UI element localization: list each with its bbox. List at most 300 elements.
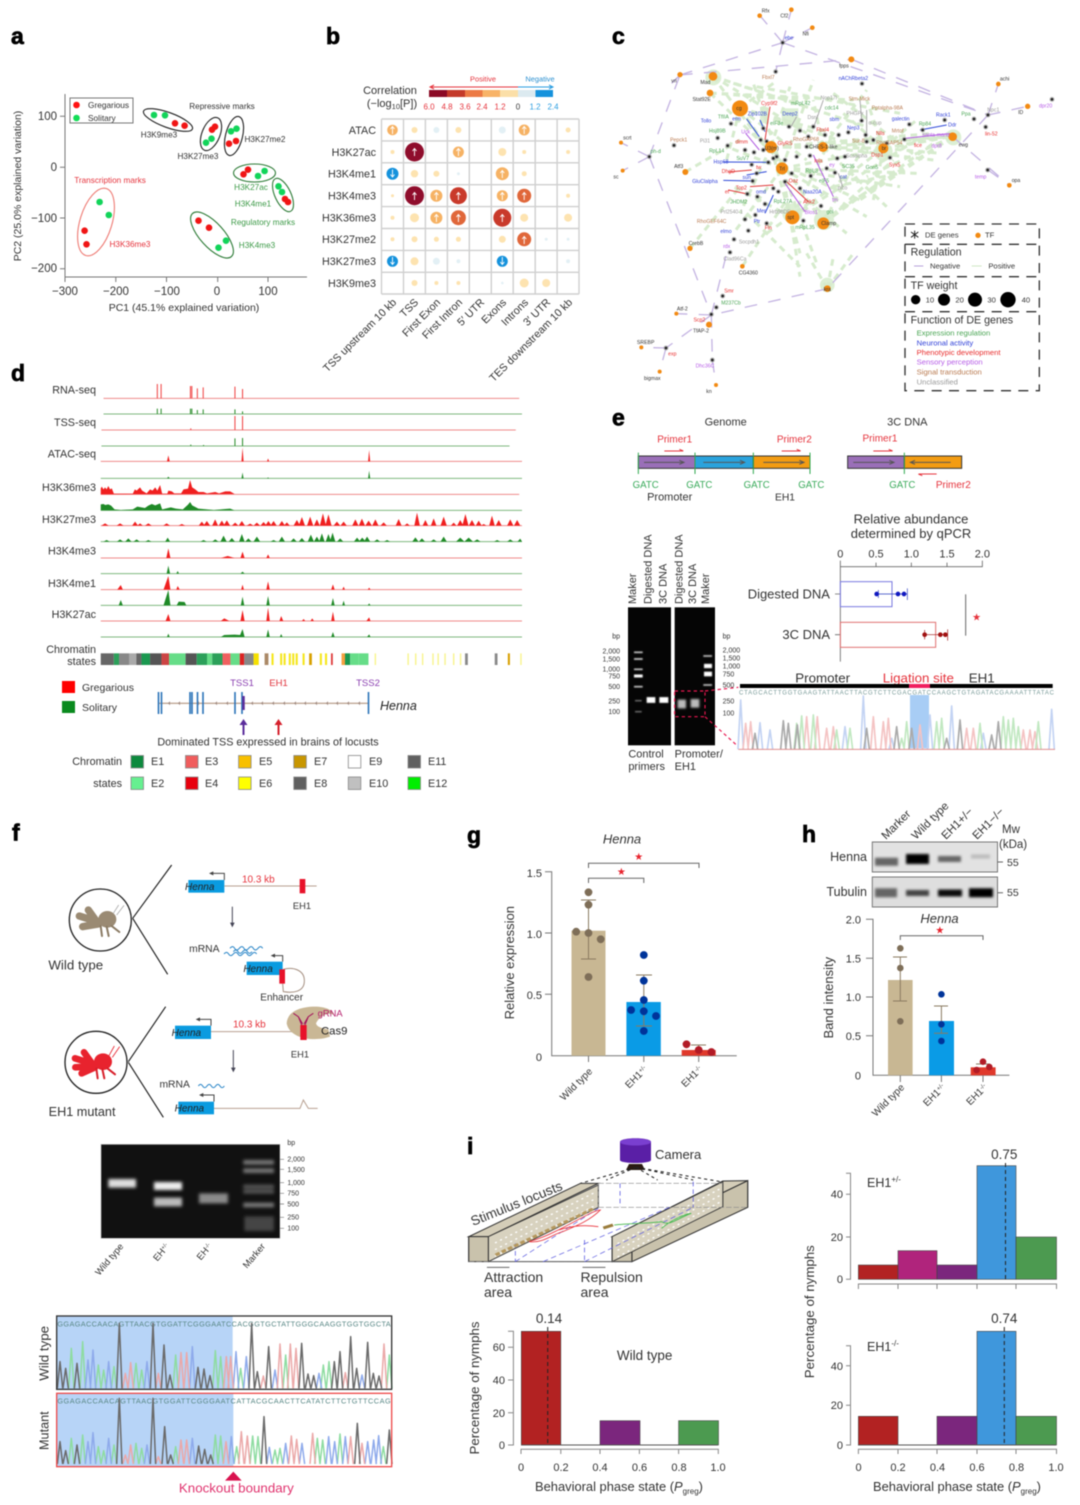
- gel size labels: 250: [287, 1215, 299, 1222]
- pale blue bubbles: [433, 126, 570, 284]
- category labels: EH1: [624, 1069, 645, 1091]
- transcription factor nodes: [619, 7, 1030, 387]
- network labels: expression regulation: ph-d: [651, 149, 661, 155]
- track labels: states: [67, 656, 97, 668]
- gel captions: [628, 749, 724, 773]
- orange bubbles: [387, 124, 530, 224]
- qPCR bar chart: Digested DNA: [748, 586, 830, 601]
- phase legend: Solitary: [82, 702, 118, 714]
- histogram: EH1 heterozygote: [831, 1147, 1056, 1289]
- chromatin states legend: E8: [314, 778, 327, 790]
- faint bubbles: [390, 127, 572, 288]
- PC2 axis title: PC2 (25.0% explained variation): [12, 111, 24, 261]
- gel size labels: 100: [723, 711, 734, 718]
- row labels: H3K36me3: [322, 212, 376, 224]
- gel size labels: 1,000: [603, 667, 620, 674]
- axis title: Band intensity: [821, 956, 836, 1039]
- gel lane labels: +/-: [160, 1242, 169, 1251]
- correlation legend: Correlation: [363, 85, 417, 97]
- gel captions: Control: [628, 749, 664, 761]
- strong bubbles: [386, 142, 531, 267]
- network labels: TFs and unlabelled: ewg: [959, 143, 968, 149]
- green H3K27me3 spikes: [104, 533, 522, 542]
- western blot: [826, 842, 1019, 907]
- network labels: TFs and unlabelled: U3(m): [765, 146, 779, 152]
- gel size labels: 750: [608, 674, 620, 681]
- network labels: TFs and unlabelled: fpps: [839, 64, 849, 70]
- network labels: sensory perception: dpr20: [1039, 104, 1052, 110]
- network labels: phenotypic development: Smr: [724, 289, 734, 295]
- gel size labels: 1,000: [723, 663, 740, 670]
- arrows at TSS1 and EH1: [240, 719, 282, 735]
- network labels: TFs and unlabelled: ID: [1018, 110, 1024, 116]
- network labels: TFs and unlabelled: vri: [671, 78, 677, 84]
- gel lane labels: [93, 1241, 267, 1277]
- green RNA and TSS spikes: [157, 409, 243, 446]
- network labels: TFs and unlabelled: opa: [1012, 178, 1020, 184]
- network labels: sensory perception: [696, 104, 1052, 370]
- network labels: phenotypic development: Dsp1: [871, 153, 883, 159]
- qPCR bar chart: 0.5: [868, 548, 884, 560]
- tick labels: 1.0: [527, 929, 542, 941]
- green track baselines: [101, 414, 522, 637]
- red ChIP and ATAC peaks: [117, 447, 371, 621]
- gel size labels: 1,500: [603, 657, 620, 664]
- histogram: wild type: ): [699, 1479, 703, 1494]
- mutant chromatogram: GGAGACCAACAGTTAACGTGGATTCGGGAATCATTACGCAACTTCATATCTTCTGTTCCAG: [57, 1396, 391, 1405]
- panel letter i: i: [467, 1133, 473, 1159]
- western blot: 55: [1007, 887, 1019, 899]
- signal tracks: [101, 384, 522, 665]
- histogram: wild type: Percentage of nymphs: [467, 1321, 482, 1455]
- Cas9 targeting locus: Henna: [172, 1028, 202, 1039]
- histogram: EH1 homozygote: 0.74: [991, 1311, 1018, 1326]
- significance brackets: [588, 852, 699, 883]
- histogram: EH1 homozygote: ): [1037, 1479, 1041, 1494]
- histogram: wild type: 0.8: [671, 1462, 687, 1474]
- histogram: wild type: 60: [493, 1342, 505, 1354]
- panel d: genome tracks: [11, 360, 522, 790]
- network labels: neuronal activity: sun: [743, 175, 751, 181]
- legend: group colours: Solitary: [88, 113, 117, 123]
- network legend: Sensory perception: [917, 358, 983, 367]
- cluster ellipses: [70, 104, 298, 265]
- PCA tick labels: −300: [52, 286, 78, 298]
- qPCR bar chart: 1.0: [904, 548, 919, 560]
- knockout boundary marker: Knockout boundary: [179, 1481, 294, 1496]
- gel lane labels: -/-: [204, 1242, 212, 1250]
- chromatin states legend: E2: [151, 778, 164, 790]
- histogram: wild type: 0: [499, 1440, 505, 1452]
- TSS caption: Dominated TSS expressed in brains of locusts: [157, 736, 379, 748]
- column labels: TES downstream 10 kb: [487, 297, 575, 384]
- 3C DNA construct: Primer1: [863, 434, 898, 445]
- network labels: signal transduction: Sur-8: [852, 139, 865, 145]
- genome construct: GATC: [798, 480, 824, 491]
- panel b: correlation bubble matrix: [321, 23, 579, 384]
- mark labels: Transcription marks: [74, 176, 146, 185]
- network labels: unclassified: Hrb98DE: [769, 209, 791, 215]
- network labels: neuronal activity: Mer: [757, 208, 766, 214]
- correlation legend: 2.4: [476, 102, 488, 112]
- network labels: neuronal activity: ebe: [785, 35, 793, 41]
- network labels: neuronal activity: Naa20A: [803, 190, 822, 196]
- significance bracket: ★: [935, 926, 944, 936]
- network labels: unclassified: Socpdh1: [739, 239, 759, 245]
- track labels: [42, 384, 97, 668]
- network labels: TFs and unlabelled: Cf2: [780, 13, 788, 19]
- histogram: EH1 homozygote: EH1: [867, 1340, 891, 1354]
- network labels: TFs and unlabelled: scrt: [623, 135, 632, 141]
- histogram: EH1 homozygote: 0.8: [1009, 1462, 1024, 1474]
- bubble arrows: [390, 126, 526, 264]
- track labels: H3K36me3: [42, 482, 96, 494]
- network labels: sensory perception: Dhc36C: [696, 364, 715, 370]
- network labels: sensory perception: Blos1: [805, 210, 818, 216]
- network labels: phenotypic development: Fbxl4: [816, 127, 829, 133]
- attraction area label: area: [484, 1284, 512, 1300]
- histogram: EH1 heterozygote: 0.75: [991, 1147, 1017, 1162]
- row labels: H3K27ac: [332, 147, 377, 159]
- wild type arrow: [230, 907, 235, 927]
- network labels: phenotypic development: GlyRS: [778, 141, 793, 147]
- network labels: signal transduction: Pptalpha-98A: [872, 105, 904, 111]
- histogram: EH1 homozygote: 1.0: [1048, 1462, 1064, 1474]
- histogram: EH1 homozygote: 40: [831, 1361, 843, 1373]
- mark labels: H3K27ac: [234, 183, 268, 192]
- qPCR bar chart: determined by qPCR: [851, 526, 971, 541]
- gel size labels: 250: [608, 698, 620, 705]
- PCA tick labels: [31, 111, 278, 298]
- network labels: neuronal activity: sbm: [829, 117, 839, 123]
- column labels: 5′ UTR: [455, 296, 487, 329]
- network labels: phenotypic development: Top2: [736, 186, 747, 192]
- network labels: signal transduction: RhoGAP54: [876, 141, 902, 147]
- network labels: TFs and unlabelled: Stat92E: [692, 97, 711, 103]
- Cas9 targeting locus: 10.3 kb: [233, 1020, 266, 1031]
- Cas9 targeting locus: EH1: [291, 1050, 309, 1060]
- panel e: 3C ligation assay: [603, 405, 1055, 773]
- network labels: TFs and unlabelled: kn: [706, 389, 712, 395]
- panel f: genotyping gel and sequencing: [36, 1140, 392, 1496]
- mutant mRNA: mRNA: [159, 1079, 190, 1090]
- chromatin states legend: [72, 756, 447, 790]
- network labels: expression regulation: [651, 101, 971, 306]
- network labels: expression regulation: RpL27A: [774, 199, 793, 205]
- network labels: sensory perception: tm: [832, 198, 838, 204]
- active locus with looped enhancer: [243, 954, 304, 1003]
- network labels: unclassified: [700, 96, 999, 263]
- chromatin states legend: E11: [428, 756, 446, 768]
- title: Henna: [603, 832, 641, 846]
- network labels: neuronal activity: erm: [732, 117, 741, 123]
- gel lane labels: Maker: [700, 573, 712, 604]
- mark labels: H3K27me2: [245, 135, 286, 144]
- wild type chromatogram: [36, 1316, 392, 1389]
- axis title: Relative expression: [502, 906, 517, 1019]
- panel h: western blot and band intensity: [802, 800, 1027, 1119]
- genome construct: Primer1: [657, 434, 693, 445]
- network labels: unclassified: Scsalpha: [846, 154, 867, 160]
- network labels: TFs and unlabelled: bigmax: [644, 376, 661, 382]
- chromatin states legend: states: [93, 778, 123, 790]
- mark labels: Regulatory marks: [231, 218, 295, 227]
- histogram: wild type: Behavioral phase state (P: [535, 1479, 683, 1494]
- network labels: signal transduction: RhoGEF64C: [697, 219, 727, 225]
- row labels: H3K27me3: [322, 256, 376, 268]
- blot lane labels: [880, 800, 1027, 851]
- panel letter a: a: [11, 23, 24, 49]
- panel letter h: h: [802, 821, 816, 847]
- gel size labels: 2,000: [287, 1157, 305, 1164]
- correlation legend: 1.2: [494, 102, 506, 112]
- green H3K36me3 profile: [101, 502, 235, 510]
- gel lane labels: Digested DNA: [674, 534, 686, 604]
- network labels: TFs and unlabelled: Atf-2: [677, 307, 688, 313]
- network labels: neuronal activity: [692, 35, 957, 235]
- network labels: phenotypic development: Ank2: [803, 200, 815, 206]
- gel lane labels: Wild type: [93, 1242, 126, 1277]
- correlation legend: 0: [516, 102, 521, 112]
- network labels: unclassified: Dsnl: [808, 115, 818, 121]
- red RNA and TSS spikes: [157, 384, 243, 430]
- network labels: phenotypic development: Nlls: [876, 131, 885, 137]
- mutant arrow: [231, 1050, 236, 1072]
- PCA tick labels: 100: [258, 286, 278, 298]
- column labels: First Exon: [400, 297, 443, 339]
- knockout boundary marker: [179, 1472, 294, 1496]
- gel size labels: 2,000: [603, 649, 620, 656]
- histogram: EH1 heterozygote: 40: [831, 1189, 843, 1201]
- track labels: RNA-seq: [52, 384, 96, 396]
- wild type locust icon: [69, 889, 131, 951]
- red track baselines: [101, 398, 522, 621]
- gel size labels: 750: [723, 672, 734, 679]
- network labels: TFs and unlabelled: Mad: [700, 80, 710, 86]
- network labels: phenotypic development: lin-52: [985, 131, 998, 137]
- genome construct: [633, 417, 824, 504]
- network labels: sensory perception: rdx: [723, 244, 731, 250]
- category labels: EH1: [680, 1068, 701, 1090]
- sequencing chromatogram: CTAGCACTTGGTGAAGTATTAACTTACGTCTTCGACGATCCAAGCTGTAGATACGAAAATTTATAC: [739, 691, 1055, 697]
- qPCR bar chart: Relative abundance: [854, 511, 968, 526]
- network labels: neuronal activity: Ptr: [754, 219, 761, 225]
- network labels: unclassified: Nop17l: [820, 96, 837, 102]
- bars: [572, 931, 716, 1056]
- legend: group colours: [70, 98, 133, 123]
- genome construct: EH1: [775, 493, 795, 504]
- network labels: sensory perception: Uck: [741, 130, 751, 136]
- network legend: 40: [1022, 295, 1030, 304]
- gel size labels: 100: [608, 709, 620, 716]
- track labels: H3K4me3: [48, 546, 96, 558]
- network labels: sensory perception: ey: [829, 162, 835, 168]
- significance bracket: [900, 926, 983, 940]
- data points: [572, 888, 605, 981]
- network labels: sensory perception: santa-maria: [922, 133, 950, 139]
- network labels: TFs and unlabelled: CrebB: [689, 241, 704, 247]
- track labels: H3K27me3: [42, 514, 96, 526]
- network labels: sensory perception: temp: [975, 174, 987, 180]
- network labels: signal transduction: [670, 75, 904, 225]
- qPCR bar chart: 3C DNA: [782, 627, 830, 642]
- panel letter e: e: [612, 405, 625, 431]
- blot lane labels: (kDa): [999, 839, 1027, 851]
- gel size labels: 1,500: [287, 1167, 305, 1174]
- data points: [897, 945, 904, 1025]
- error bars: [893, 957, 990, 1064]
- Henna gene model: EH1: [269, 678, 288, 689]
- labelled coloured edges: [723, 100, 952, 213]
- genome construct: Promoter: [647, 492, 693, 504]
- red H3K27me3 spikes: [101, 513, 520, 526]
- chromatin states legend: E5: [259, 756, 272, 768]
- network labels: neuronal activity: Tollo: [701, 119, 711, 125]
- histogram: EH1 homozygote: [831, 1311, 1064, 1496]
- network labels: TFs and unlabelled: Clamp: [821, 221, 836, 227]
- genome construct: GATC: [686, 480, 712, 491]
- network labels: neuronal activity: Zip102B: [748, 111, 767, 117]
- histogram: EH1 homozygote: 20: [831, 1400, 843, 1412]
- histogram: EH1 heterozygote: 0: [837, 1274, 843, 1286]
- attraction area label: Attraction: [484, 1269, 543, 1285]
- positive regulation edges: [685, 76, 963, 289]
- network labels: neuronal activity: Ddr: [948, 123, 957, 129]
- knockout locus: Henna: [175, 1103, 205, 1114]
- Cas9 targeting locus: gRNA: [318, 1009, 343, 1019]
- network labels: phenotypic development: Syx5: [889, 162, 901, 168]
- correlation legend: Negative: [525, 74, 555, 84]
- gel size labels: 1,500: [723, 656, 740, 663]
- wild type mRNA: [189, 944, 263, 956]
- panel letter b: b: [326, 23, 340, 49]
- gel size labels: bp: [287, 1140, 295, 1147]
- track labels: H3K27ac: [52, 609, 97, 621]
- histogram: wild type: [467, 1311, 726, 1496]
- mutant wedge: [128, 1007, 166, 1117]
- genome construct: GATC: [633, 480, 659, 491]
- network labels: TFs and unlabelled: Atf3: [674, 164, 683, 170]
- chromatin states legend: E12: [428, 778, 447, 790]
- network labels: sensory perception: dpr8: [931, 144, 942, 150]
- panel letter d: d: [11, 360, 25, 386]
- blot lane labels: EH1+/−: [940, 806, 976, 842]
- network labels: neuronal activity: Deep2: [782, 111, 798, 117]
- PCA tick labels: −200: [103, 286, 129, 298]
- stimulus label: Stimulus locusts: [469, 1178, 565, 1229]
- tick labels: 2.0: [846, 914, 861, 926]
- network labels: neuronal activity: omd: [756, 189, 766, 195]
- phase legend: Gregarious: [82, 682, 134, 694]
- wild type locus: [185, 871, 317, 911]
- blot lane labels: Wild type: [910, 800, 952, 842]
- histogram: wild type: 20: [493, 1408, 505, 1420]
- gel size labels: [280, 1140, 305, 1233]
- PCA tick labels: 0: [51, 162, 57, 174]
- mark labels: H3K9me3: [141, 130, 178, 140]
- column labels: Exons: [479, 296, 510, 326]
- network labels: phenotypic development: exp: [668, 352, 677, 358]
- network legend: Signal transduction: [917, 368, 982, 377]
- correlation legend: [P]): [400, 98, 417, 110]
- bars: [888, 980, 996, 1075]
- gel lane labels: EH: [195, 1246, 211, 1262]
- network labels: TFs and unlabelled: br: [882, 146, 887, 152]
- qPCR bar chart: 0: [837, 548, 843, 560]
- network labels: phenotypic development: tw: [756, 165, 762, 171]
- active locus with looped enhancer: Henna: [243, 964, 273, 975]
- column labels: TSS: [398, 297, 421, 320]
- network labels: expression regulation: M237Cb: [721, 300, 741, 306]
- correlation legend: 6.0: [423, 102, 435, 112]
- correlation legend: 2.4: [547, 102, 559, 112]
- Henna gene model: [158, 678, 417, 714]
- mutant locust icon: [65, 1031, 127, 1093]
- correlation legend: (−log: [367, 98, 392, 110]
- sequencing chromatogram: Ligation site: [883, 670, 954, 685]
- PCA tick labels: 100: [38, 111, 57, 123]
- camera icon: [620, 1138, 702, 1170]
- network labels: neuronal activity: Nep3: [847, 125, 860, 131]
- title: Henna: [920, 911, 959, 926]
- mark labels: H3K4me1: [235, 200, 272, 208]
- genome construct: Genome: [705, 417, 747, 429]
- chromatin states legend: E6: [259, 778, 272, 790]
- genotyping gel: [101, 1144, 280, 1238]
- network labels: phenotypic development: fice: [914, 143, 922, 149]
- mark labels: H3K27me3: [178, 152, 219, 161]
- Henna gene model: TSS1: [230, 678, 254, 689]
- track labels: Chromatin: [46, 644, 96, 656]
- PCA tick labels: −100: [31, 213, 57, 225]
- network labels: signal transduction: Stm-Mick: [849, 97, 870, 103]
- tick labels: 1.0: [846, 992, 861, 1004]
- mutant label: EH1 mutant: [49, 1105, 116, 1119]
- network labels: phenotypic development: DhgD: [722, 169, 735, 175]
- wild type chromatogram: Wild type: [36, 1326, 51, 1381]
- gel size labels: bp: [723, 634, 731, 641]
- Henna gene model: TSS2: [356, 678, 380, 689]
- blot lane labels: EH1−/−: [971, 806, 1007, 842]
- panel a: PCA scatter: [11, 23, 307, 314]
- sequencing chromatogram: EH1: [969, 670, 995, 685]
- category labels: -/-: [979, 1083, 987, 1091]
- network legend: Negative: [930, 262, 960, 271]
- network labels: neuronal activity: elmo: [720, 229, 732, 235]
- row labels: [322, 125, 377, 290]
- qPCR bar chart: 1.5: [939, 548, 955, 560]
- gel size labels: 250: [723, 699, 734, 706]
- gel size labels: 2,000: [723, 647, 740, 654]
- gel size labels: 500: [723, 682, 734, 689]
- error bars: [581, 900, 706, 1050]
- 3C DNA construct: Primer2: [936, 480, 971, 491]
- Cas9 targeting locus: [172, 1007, 347, 1060]
- histogram: wild type: 0.2: [553, 1462, 569, 1474]
- gels: [628, 607, 738, 747]
- network labels: neuronal activity: Hsp68: [714, 160, 729, 166]
- histogram: EH1 heterozygote: EH1: [867, 1176, 891, 1190]
- network labels: phenotypic development: Cyp9f2: [761, 101, 778, 107]
- network legend: Function of DE genes: [911, 314, 1013, 326]
- histogram: EH1 heterozygote: +/-: [891, 1175, 901, 1184]
- histogram: EH1 homozygote: Behavioral phase state (P: [873, 1479, 1021, 1494]
- sequencing chromatogram: [738, 670, 1055, 749]
- Cas9 targeting locus: Cas9: [321, 1026, 347, 1038]
- network labels: expression regulation: JHDM2: [730, 199, 747, 205]
- wild type mRNA: mRNA: [189, 944, 220, 955]
- network legend: 30: [987, 295, 996, 304]
